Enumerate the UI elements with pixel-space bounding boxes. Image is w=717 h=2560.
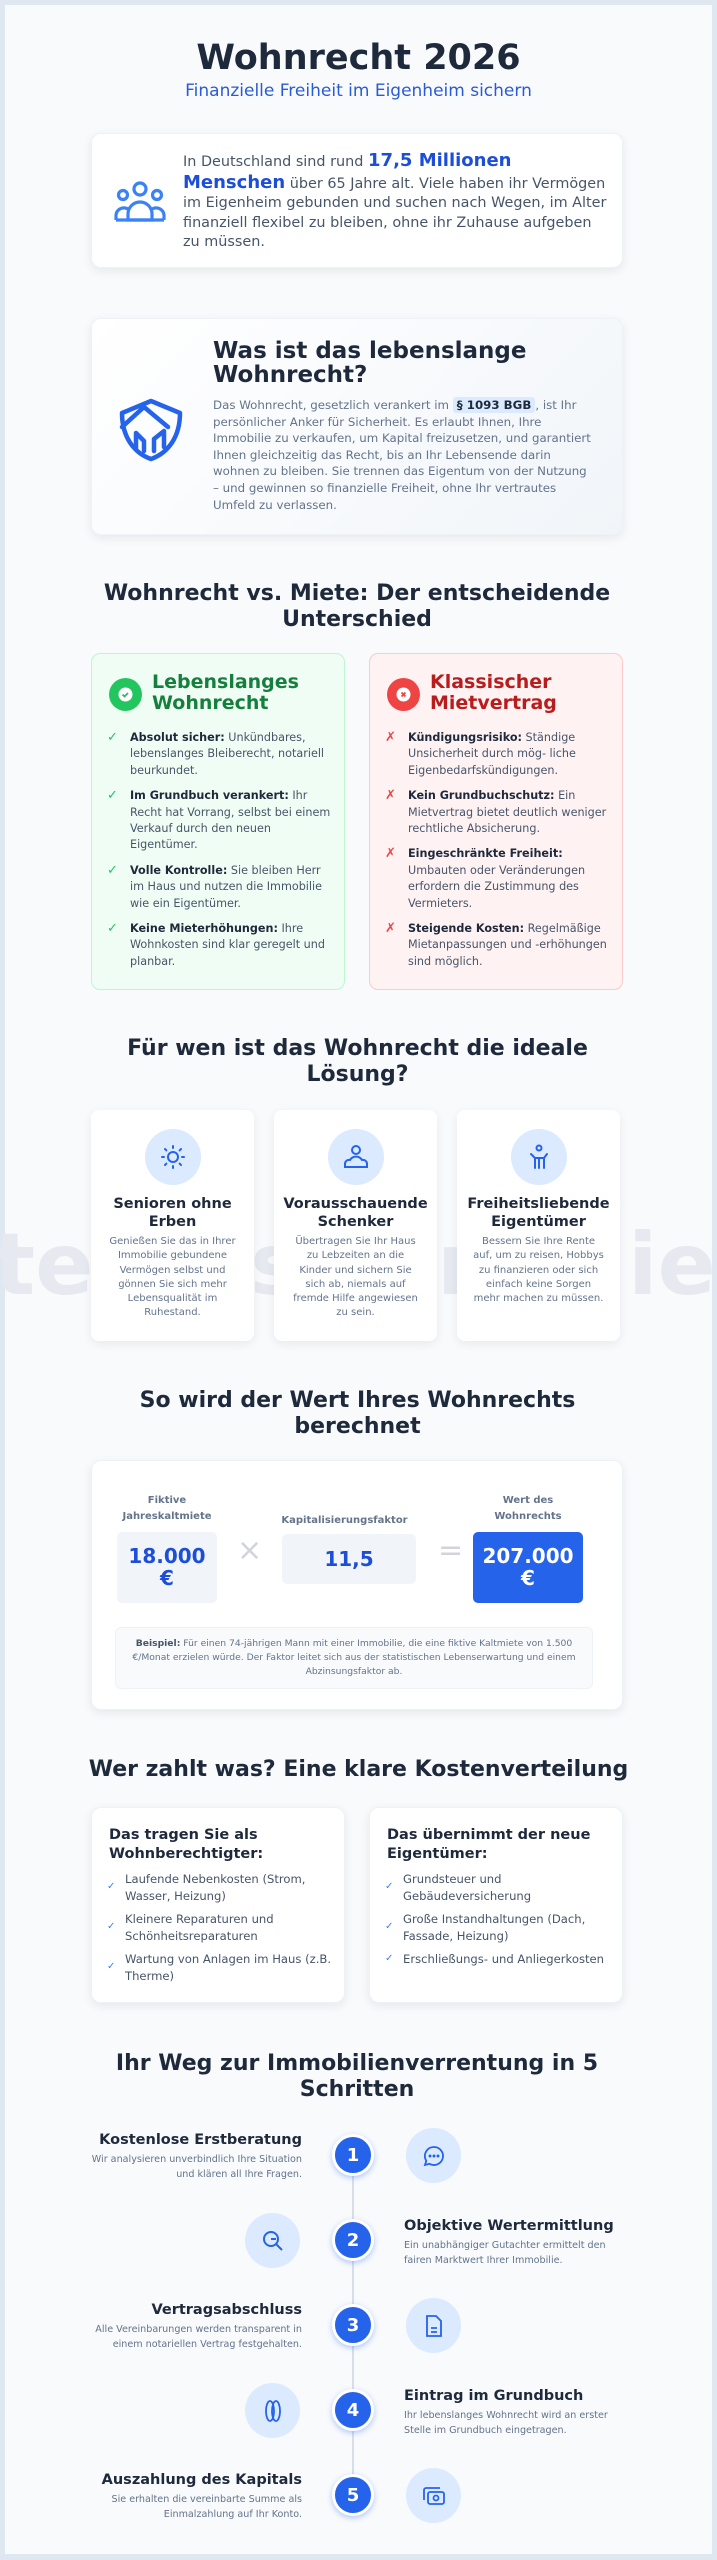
text: intro: In Deutschland sind rund 17,5 Millionen Menschen über 65 Jahre alt. Viele haben ihr Vermögen im Eigenheim gebunden und suchen nach Wegen, im Alter finanziell flexibel zu bleiben, ohne ihr Zuhause aufgeben zu müssen. [183,150,606,250]
heading: Das tragen Sie als [109,1827,258,1843]
box: result [473,1532,583,1603]
icon: sun [144,1129,200,1185]
icon: person [328,1129,384,1185]
list: pros: Keine Mieterhöhungen: Ihre Wohnkosten sind klar geregelt und planbar. [130,922,325,968]
card: Freiheitsliebende Eigentümer: Freiheitsliebende [467,1196,610,1212]
text: Eintrag im Grundbuch [404,2388,583,2404]
box: 11,5: 11,5 [324,1547,374,1571]
list: Wartung von Anlagen im Haus (z.B. Therme) [125,1952,331,1982]
number circle: 1 [347,2144,359,2166]
card: Vorausschauende Schenker: Schenker [318,1214,393,1230]
heading: Eigentümer: [387,1846,488,1862]
list: pros: ✓ [107,921,118,936]
text: einem notariellen Vertrag festgehalten. [113,2339,302,2350]
list: cons: Steigende Kosten: Regelmäßige Mietanpassungen und -erhöhungen sind möglich. [408,922,607,968]
list: cons: ✗ [385,921,396,936]
box: 18.000 € [117,1532,217,1603]
list [107,1872,331,1982]
list: Erschließungs- und Anliegerkosten [403,1952,604,1966]
text block: Das Wohnrecht, gesetzlich verankert im § 1093 BGB , ist Ihr persönlicher Anker für Sicherheit. Es erlaubt Ihnen, Ihre Immobilie zu verkaufen, um Kapital freizusetzen, und garantiert Ihnen gleichzeitig das Recht, bis an Ihr Lebensende darin wohnen zu bleiben. Sie trennen das Eigentum von der Nutzung – und gewinnen so finanzielle Freiheit, ohne Ihr vertrautes Umfeld zu verlassen. [213,398,591,512]
heading [430,671,557,714]
text: Vertragsabschluss [151,2302,302,2318]
callout: example [115,1627,593,1689]
list: ✓ [107,1961,115,1972]
watermark: s [250,1215,301,1315]
text: Stelle im Grundbuch eingetragen. [404,2425,567,2436]
text [404,2218,614,2266]
card: Vorausschauende Schenker: Übertragen Sie Ihr Haus zu Lebzeiten an die Kinder und sichern Sie sich ab, niemals auf fremde Hilfe angewiesen zu sein. [293,1236,418,1318]
step 4 [245,2383,608,2438]
number circle [332,2474,374,2516]
heading: Das übernimmt der neue [387,1827,590,1843]
title: Wohnrecht 2026 [196,38,521,78]
box: 18.000 €: € [160,1566,174,1590]
list: pros: Volle Kontrolle: Sie bleiben Herr [130,864,321,877]
heading: target groups: Für wen ist das Wohnrecht die ideale Lösung? [127,1036,588,1087]
list: cons: Umbauten oder Veränderungen erfordern die Zustimmung des Vermieters. [408,864,585,910]
text: Einmalzahlung auf Ihr Konto. [164,2509,302,2520]
list: Große Instandhaltungen (Dach, Fassade, Heizung) [403,1912,585,1942]
icon: search [245,2213,300,2268]
card: Senioren ohne Erben: Genießen Sie das in Ihrer Immobilie gebundene Vermögen selbst und gönnen Sie sich mehr Lebensqualität im Ruhestand. [109,1236,236,1318]
watermark: n [437,1215,498,1315]
list: ✓ [107,1921,115,1932]
list: cons: ✗ [385,788,396,803]
callout: example: Beispiel: Für einen 74-jährigen Mann mit einer Immobilie, die eine fiktive Kaltmiete von 1.500 €/Monat erzielen würde. Der Faktor leitet sich aus der statistischen Lebenserwartung und einem Abzinsungsfaktor ab. [132,1638,576,1677]
number circle [332,2304,374,2346]
heading: Lebenslanges [152,671,299,693]
step 5 [102,2468,461,2523]
text [102,2472,302,2520]
icon: person walking [510,1129,566,1185]
text: Ein unabhängiger Gutachter ermittelt den [404,2240,606,2251]
number circle [332,2219,374,2261]
icon: chat [406,2128,461,2183]
label: Kapitalisierungsfaktor: Kapitalisierungsfaktor [281,1515,408,1526]
list: pros [107,730,330,968]
operator: equals: = [438,1533,463,1568]
card: Vorausschauende Schenker [274,1110,437,1341]
heading: Was ist das lebenslange Wohnrecht? [213,338,526,388]
text: Sie erhalten die vereinbarte Summe als [112,2494,302,2505]
panel: what is Wohnrecht [91,318,623,535]
heading: Wohnrecht [152,692,269,714]
list: pros: Absolut sicher: Unkündbares, lebenslanges Bleiberecht, notariell beurkundet. [130,731,324,777]
box: 11,5 [282,1534,416,1584]
card: Freiheitsliebende Eigentümer [457,1110,620,1341]
card: Vorausschauende Schenker: Vorausschauende [283,1196,428,1212]
list: cons: ✗ [385,730,396,745]
list: ✓ [385,1953,393,1964]
list: Kleinere Reparaturen und Schönheitsreparaturen [125,1912,274,1942]
number circle [332,2389,374,2431]
icon: x circle [387,678,420,711]
list: cons [385,730,607,968]
step 3 [95,2298,461,2353]
heading: calculation: So wird der Wert Ihres Wohnrechts berechnet [140,1388,575,1439]
text: Kostenlose Erstberatung [99,2132,302,2148]
list: cons: Eingeschränkte Freiheit: [408,847,563,860]
number circle [332,2134,374,2176]
icon: document [406,2298,461,2353]
card: Freiheitsliebende Eigentümer: Eigentümer [491,1214,586,1230]
heading: Klassischer [430,671,552,693]
panel: Wohnrecht pros [91,653,345,990]
list: ✓ [385,1921,393,1932]
label: Fiktive Jahreskaltmiete: Jahreskaltmiete [122,1511,212,1522]
box: result: 207.000 [482,1544,574,1568]
heading: cost distribution: Wer zahlt was? Eine klare Kostenverteilung [89,1757,628,1782]
list: cons: Kein Grundbuchschutz: Ein Mietvertrag bietet deutlich weniger rechtliche Absicherung. [408,789,606,835]
text: Auszahlung des Kapitals [102,2472,302,2488]
step 1 [92,2128,461,2183]
text: und klären all Ihre Fragen. [176,2169,302,2180]
operator: times: × [237,1533,262,1568]
heading: Wohnberechtigter: [109,1846,263,1862]
panel: intro statistic [91,133,623,268]
icon: rings [245,2383,300,2438]
heading: steps: Ihr Weg zur Immobilienverrentung in 5 Schritten [116,2051,598,2102]
card: Freiheitsliebende Eigentümer: Bessern Sie Ihre Rente auf, um zu reisen, Hobbys zu finanzieren oder sich einfach keine Sorgen mehr machen zu müssen. [473,1236,604,1304]
icon: check circle [109,678,142,711]
number circle: 4 [347,2400,359,2420]
heading [152,671,299,714]
list: pros: ✓ [107,863,118,878]
box: 18.000 €: 18.000 [128,1544,206,1568]
label: Fiktive Jahreskaltmiete: Fiktive [148,1495,186,1506]
text: fairen Marktwert Ihrer Immobilie. [404,2255,563,2266]
list: pros: Im Grundbuch verankert: Ihr Recht hat Vorrang, selbst bei einem Verkauf durch den neuen Eigentümer. [130,789,330,851]
list: ✓ [107,1881,115,1892]
text: Objektive Wertermittlung [404,2218,614,2234]
panel: Mietvertrag cons [369,653,623,990]
label: Wert des Wohnrechts [494,1495,562,1522]
list: cons: Kündigungsrisiko: Ständige Unsicherheit durch mög- liche Eigenbedarfskündigungen. [408,731,576,777]
text: Alle Vereinbarungen werden transparent in [95,2324,302,2335]
panel: costs new owner [369,1807,623,2003]
timeline line [352,2160,354,2495]
list: ✓ [385,1881,393,1892]
number circle: 3 [347,2314,359,2336]
label: Wert des Wohnrechts: Wohnrechts [494,1511,562,1522]
label: Wert des Wohnrechts: Wert des [503,1495,553,1506]
card: Senioren ohne Erben [91,1110,254,1341]
panel: calculation [91,1460,623,1710]
step 2 [245,2213,614,2268]
icon: house shield [120,398,182,462]
label: Fiktive Jahreskaltmiete [122,1495,212,1522]
text [92,2132,302,2180]
list [385,1872,604,1966]
list: Grundsteuer und [403,1872,502,1886]
number circle: 2 [347,2230,359,2250]
icon: people [114,181,166,222]
list: pros: im Haus und nutzen die Immobilie wie ein Eigentümer. [130,880,322,910]
watermark [0,1215,717,1315]
text [95,2302,302,2350]
list: pros: ✓ [107,788,118,803]
panel: costs resident [91,1807,345,2003]
list: Laufende Nebenkosten (Strom, Wasser, Heizung) [125,1872,305,1902]
heading [109,1827,263,1862]
heading: Mietvertrag [430,692,557,714]
card: Senioren ohne Erben: Erben [149,1214,196,1230]
text: Wir analysieren unverbindlich Ihre Situation [92,2154,302,2165]
list: Gebäudeversicherung [403,1888,531,1902]
number circle: 5 [347,2484,359,2506]
heading [387,1827,590,1862]
subtitle: Finanzielle Freiheit im Eigenheim sichern [185,81,532,101]
text [404,2388,608,2436]
card: Senioren ohne Erben: Senioren ohne [113,1196,232,1212]
heading: comparison: Wohnrecht vs. Miete: Der entscheidende Unterschied [104,581,610,632]
list: pros: ✓ [107,730,118,745]
box: result: € [521,1566,535,1590]
list: cons: ✗ [385,846,396,861]
text: Ihr lebenslanges Wohnrecht wird an erster [404,2410,608,2421]
icon: money [406,2468,461,2523]
